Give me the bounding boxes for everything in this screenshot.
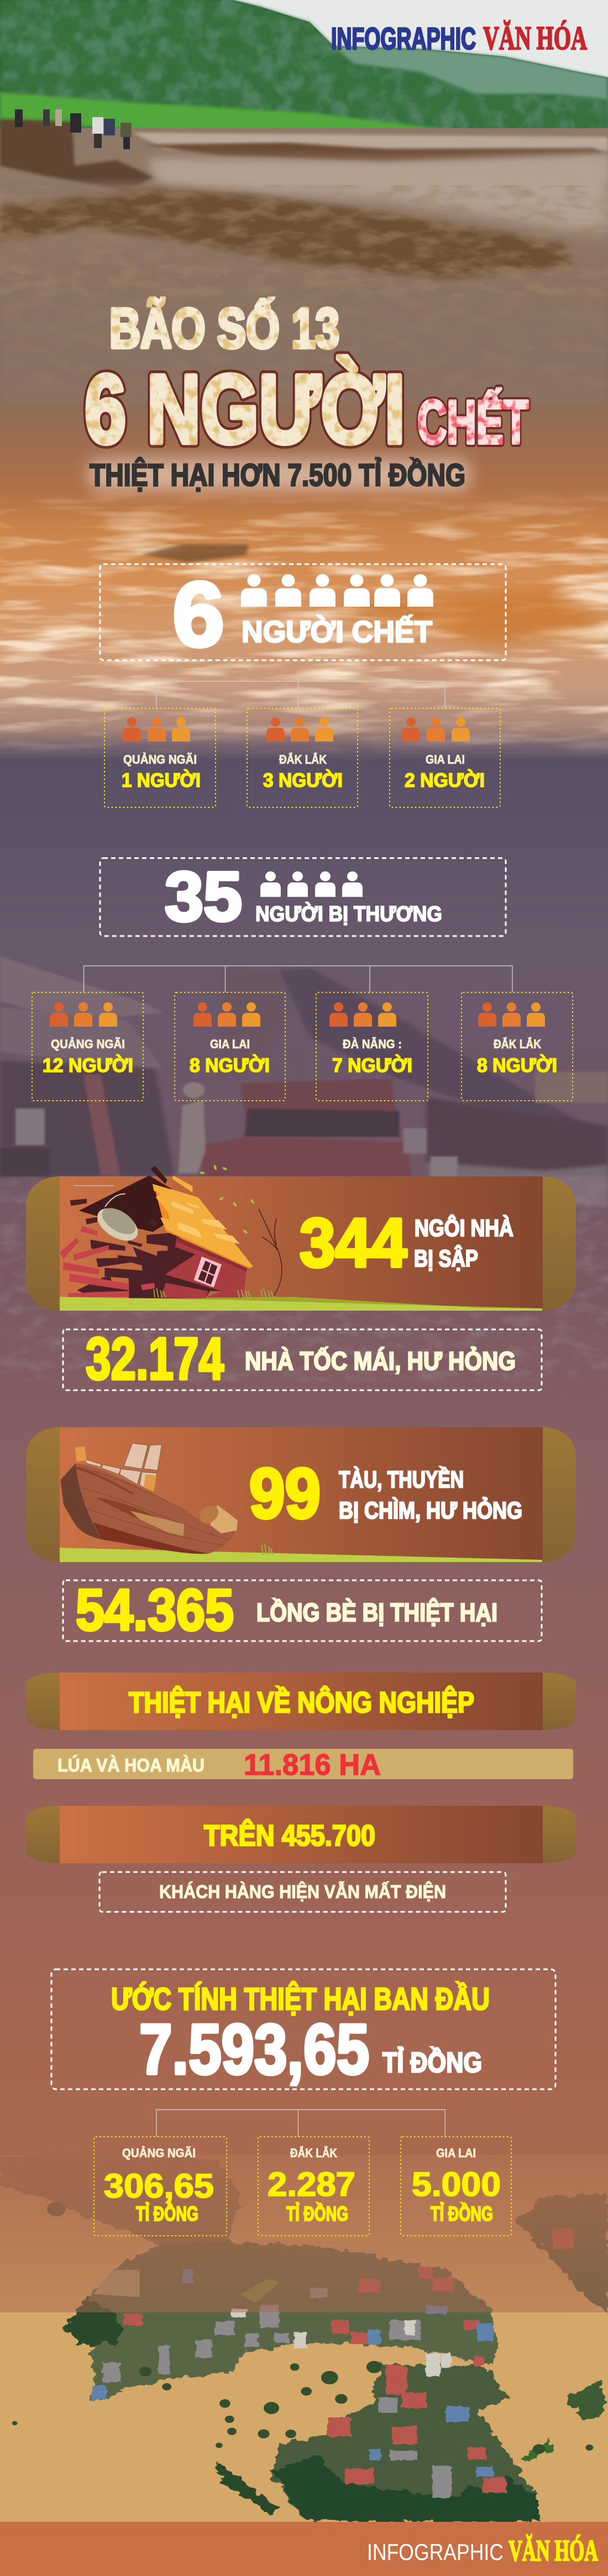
ground texture behind banners: [0, 1177, 608, 1381]
panel: fish cages: 54.365: [76, 1578, 234, 1643]
panel: Đắk Lắk damage: TỈ ĐỒNG: [286, 2202, 348, 2225]
panel: Quảng Ngãi injured: [32, 992, 143, 1101]
number 344: 344: [300, 1205, 407, 1281]
panel: Đắk Lắk injured: 8 NGƯỜI: [477, 1054, 557, 1076]
panel: Quảng Ngãi injured: QUẢNG NGÃI: [51, 1037, 125, 1051]
panel: fish cages: LỒNG BÈ BỊ THIỆT HẠI: [256, 1598, 497, 1627]
panel: Quảng Ngãi deaths: [104, 708, 216, 807]
text: tàu thuyền: TÀU, THUYỀN: [339, 1466, 464, 1493]
banner: power outage number: [26, 1806, 576, 1863]
title: Bão số 13: BÃO SỐ 13: [109, 298, 339, 360]
number 6: 6: [172, 564, 224, 666]
heading: ƯỚC TÍNH THIỆT HẠI BAN ĐẦU: [111, 1981, 490, 2017]
panel: Gia Lai deaths: 2 NGƯỜI: [405, 769, 485, 791]
logo: INFOGRAPHIC: [331, 21, 476, 56]
bar: rice and crops: 11.816 HA: [244, 1748, 381, 1781]
panel: estimated initial damage: [51, 1969, 555, 2089]
title: 6 người: 6 NGƯỜI: [85, 355, 405, 464]
banner: sunken boats: [26, 1427, 576, 1562]
ground: [60, 1297, 542, 1311]
banner: agriculture damage: THIỆT HẠI VỀ NÔNG NGHIỆP: [129, 1685, 474, 1719]
footer bar: INFOGRAPHIC: [367, 2539, 504, 2565]
panel: Đắk Lắk deaths: [247, 708, 358, 807]
icon: grass tuft: [261, 1544, 273, 1555]
people on river bank: [15, 109, 132, 149]
panel: injured total: [100, 858, 506, 936]
title block: [85, 298, 528, 493]
panel: Gia Lai deaths: GIA LAI: [426, 753, 465, 766]
panel: Quảng Ngãi damage: [94, 2137, 227, 2236]
panel: Quảng Ngãi injured: 12 NGƯỜI: [43, 1054, 133, 1076]
title: chết: [417, 388, 528, 456]
panel: Đắk Lắk damage: [258, 2137, 369, 2236]
title: chết: CHẾT: [417, 388, 528, 456]
panel: fish cages: [63, 1578, 542, 1643]
connector: damage: [156, 2110, 445, 2137]
label: người bị thương: NGƯỜI BỊ THƯƠNG: [255, 902, 442, 926]
subtitle: THIỆT HẠI HƠN 7.500 TỈ ĐỒNG: [90, 457, 465, 493]
icon: collapsing house: [60, 1165, 282, 1298]
text: bị sập: BỊ SẬP: [414, 1245, 478, 1272]
label: người chết: NGƯỜI CHẾT: [242, 614, 432, 649]
bar: rice and crops: LÚA VÀ HOA MÀU: [57, 1755, 205, 1775]
footer bar: [0, 2522, 608, 2576]
orange river photo with streaks: [0, 486, 608, 757]
panel: Gia Lai damage: TỈ ĐỒNG: [431, 2202, 493, 2225]
panel: customers without power: [99, 1872, 506, 1912]
panel: Đắk Lắk injured: ĐẮK LẮK: [494, 1037, 541, 1051]
panel: customers without power: KHÁCH HÀNG HIỆN VẪN MẤT ĐIỆN: [159, 1881, 446, 1902]
subtitle glow: [88, 459, 470, 491]
panel: Gia Lai injured: 8 NGƯỜI: [190, 1054, 270, 1076]
panel: Đắk Lắk deaths: ĐẮK LẮK: [279, 753, 327, 766]
connector: injured: [84, 966, 512, 992]
number 35: 35: [165, 858, 242, 935]
background photo: truck and market street: [0, 956, 608, 1207]
panel: Quảng Ngãi damage: 306,65: [104, 2167, 214, 2205]
panel: Gia Lai damage: GIA LAI: [436, 2146, 476, 2160]
panel: Đắk Lắk injured: [462, 992, 573, 1101]
panel: Gia Lai damage: [401, 2137, 511, 2236]
panel: Gia Lai damage: 5.000: [412, 2165, 501, 2203]
panel: Đà Nẵng injured: ĐÀ NẴNG :: [343, 1037, 402, 1051]
bar: rice and crops: [33, 1748, 573, 1781]
aerial photo: flooded village: [0, 2148, 608, 2522]
text: bị chìm hư hỏng: BỊ CHÌM, HƯ HỎNG: [339, 1497, 522, 1524]
panel: Gia Lai deaths: [390, 708, 500, 807]
total value: 7.593,65: [139, 2010, 369, 2089]
icon: broken boat: [60, 1443, 238, 1554]
banner: power outage number: TRÊN 455.700: [204, 1818, 375, 1852]
banner: collapsed houses: [26, 1165, 576, 1311]
panel: Quảng Ngãi deaths: QUẢNG NGÃI: [123, 753, 197, 766]
panel: Gia Lai injured: [175, 992, 285, 1101]
unit: TỈ ĐỒNG: [382, 2046, 482, 2078]
panel: damaged roofs: 32.174: [86, 1325, 224, 1392]
panel: Gia Lai injured: GIA LAI: [210, 1037, 250, 1051]
text: ngôi nhà: NGÔI NHÀ: [415, 1215, 513, 1242]
panel: deaths total: [100, 564, 506, 666]
banner: agriculture damage: [26, 1673, 576, 1730]
panel: Đắk Lắk deaths: 3 NGƯỜI: [263, 769, 343, 791]
panel: Đắk Lắk damage: 2.287: [268, 2165, 355, 2203]
panel: Đắk Lắk damage: ĐẮK LẮK: [290, 2146, 337, 2160]
panel: damaged roofs: [63, 1325, 542, 1392]
title: chết: CHẾT: [417, 388, 528, 456]
title: 6 người: 6 NGƯỜI: [85, 355, 405, 464]
connector: deaths: [156, 681, 445, 708]
panel: Quảng Ngãi damage: TỈ ĐỒNG: [136, 2202, 198, 2225]
panel: Đà Nẵng injured: 7 NGƯỜI: [332, 1054, 412, 1076]
icons: four white people: [260, 871, 363, 897]
number 99: 99: [249, 1454, 321, 1533]
panel: damaged roofs: NHÀ TỐC MÁI, HƯ HỎNG: [245, 1347, 516, 1375]
panel: Quảng Ngãi deaths: 1 NGƯỜI: [122, 769, 201, 791]
panel: Quảng Ngãi damage: QUẢNG NGÃI: [122, 2146, 196, 2160]
top photo: flooded river and hills: [0, 0, 608, 403]
aerial photo brown overlay: [0, 2094, 608, 2312]
icons: six white people: [241, 574, 433, 607]
panel: Đà Nẵng injured: [316, 992, 428, 1101]
ground: [60, 1548, 542, 1562]
